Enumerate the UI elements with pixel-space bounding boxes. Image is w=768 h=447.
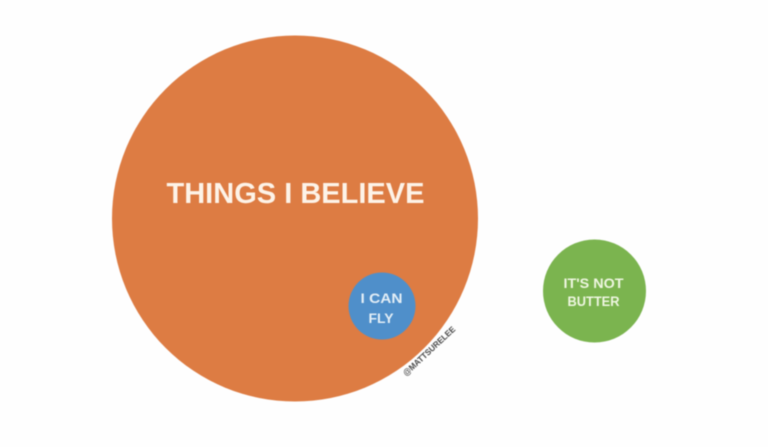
heading: things I believe: THINGS I BELIEVE	[166, 178, 424, 210]
green circle: it's not butter	[543, 240, 646, 342]
green circle: it's not butter: BUTTER	[568, 294, 620, 309]
green circle: it's not butter: IT'S NOT	[564, 276, 624, 291]
small circle: I can fly: I CAN	[360, 291, 402, 306]
small circle: I can fly: FLY	[368, 311, 394, 326]
credit: @mattsurelee: @MATTSURELEE	[401, 324, 457, 378]
small circle: I can fly	[348, 272, 416, 340]
